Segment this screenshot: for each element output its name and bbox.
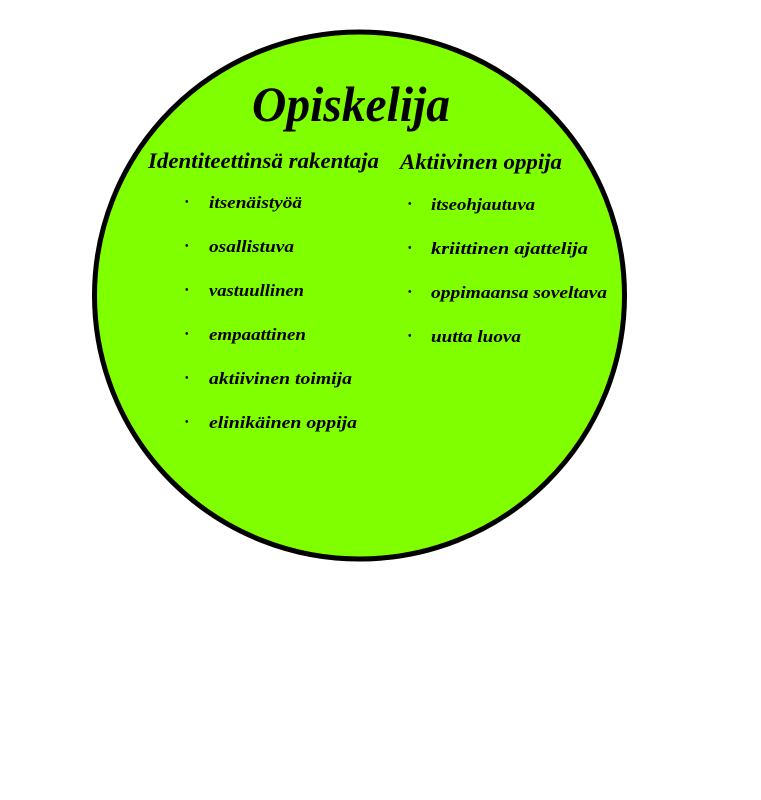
list item: vastuullinen: vastuullinen (209, 281, 304, 300)
list item: vastuullinen: • (185, 285, 189, 296)
list item: oppimaansa soveltava: oppimaansa soveltava (431, 283, 608, 302)
list item: empaattinen: empaattinen (209, 325, 306, 344)
list item: oppimaansa soveltava: • (408, 287, 412, 298)
list item: elinikäinen oppija: • (185, 417, 189, 428)
list item: osallistuva: osallistuva (209, 237, 295, 256)
list item: itseohjautuva: itseohjautuva (431, 195, 536, 214)
list item: itseohjautuva: • (408, 199, 412, 210)
list item: itsenäistyöä: • (185, 197, 189, 208)
list item: osallistuva (185, 237, 295, 256)
heading: right column: Aktiivinen oppija (398, 149, 562, 174)
list item: uutta luova: uutta luova (431, 327, 522, 346)
list item: osallistuva: • (185, 241, 189, 252)
text block: right column (398, 149, 608, 346)
list item: kriittinen ajattelija: kriittinen ajattelija (431, 239, 589, 258)
list item: itsenäistyöä (185, 193, 303, 212)
list item: aktiivinen toimija: aktiivinen toimija (209, 369, 353, 388)
list item: elinikäinen oppija: elinikäinen oppija (209, 413, 358, 432)
list item: itsenäistyöä: itsenäistyöä (209, 193, 303, 212)
heading: left column: Identiteettinsä rakentaja (147, 148, 379, 173)
list item: uutta luova: • (408, 331, 412, 342)
list item: kriittinen ajattelija: • (408, 243, 412, 254)
list item: empaattinen: • (185, 329, 189, 340)
list item: aktiivinen toimija: • (185, 373, 189, 384)
panel: green circle (94, 32, 624, 559)
text block: left column (147, 148, 379, 432)
title: Opiskelija (252, 76, 450, 132)
